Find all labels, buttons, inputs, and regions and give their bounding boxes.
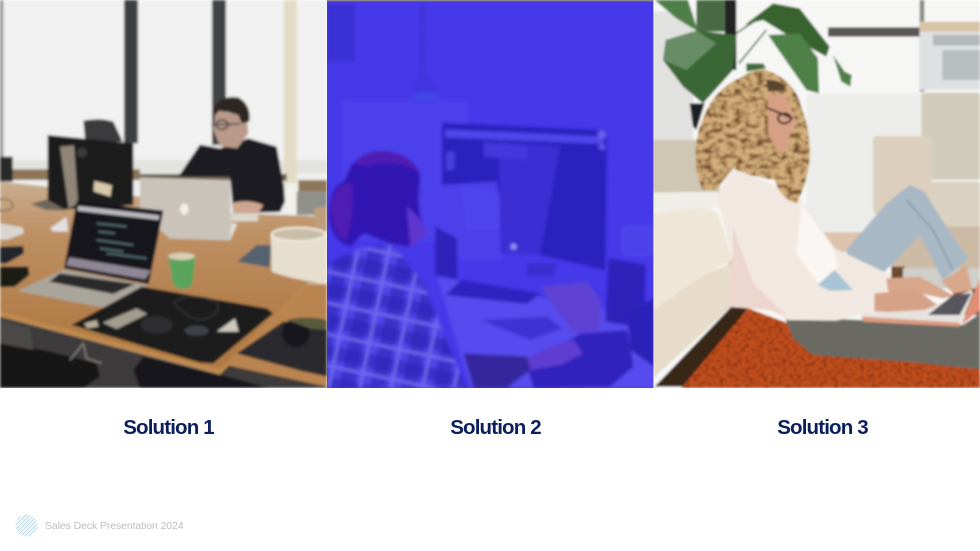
heading: Solution 3: Solution 3 (777, 416, 868, 439)
photo: blue tinted woman at desktop computer (327, 0, 654, 388)
book (237, 245, 272, 267)
keyboard (445, 280, 540, 304)
woman hair (329, 151, 427, 247)
face (768, 93, 797, 153)
heading: Solution 2: Solution 2 (450, 416, 541, 439)
hands (886, 277, 955, 298)
laptop (863, 290, 973, 323)
hair (696, 70, 810, 203)
desk (437, 277, 654, 388)
silver laptop (140, 177, 231, 241)
window and wall (828, 27, 920, 37)
photo: woman with curly hair using laptop on floor (653, 0, 980, 388)
shirt (716, 168, 890, 321)
heading: Solution 1: Solution 1 (123, 416, 214, 439)
plaid shirt (327, 245, 467, 388)
knee jeans (846, 185, 968, 287)
back monitor (48, 135, 133, 209)
plant (725, 0, 736, 70)
speakers (435, 227, 457, 279)
lower right table (0, 284, 327, 388)
left desk items (0, 223, 24, 240)
right couch (921, 93, 980, 180)
dark laptop (64, 201, 163, 284)
white box (271, 228, 327, 284)
left couch (728, 257, 751, 310)
icon: footer striped logo (16, 514, 38, 536)
mug (168, 253, 196, 289)
footer text: Sales Deck Presentation 2024 (45, 520, 183, 532)
table (0, 182, 327, 374)
foot (941, 265, 972, 293)
grey trousers (785, 313, 980, 369)
man (178, 138, 285, 213)
photo: office team at laptops (0, 0, 327, 388)
mat (72, 287, 273, 363)
monitor (442, 123, 607, 270)
floor and rug (655, 305, 748, 387)
